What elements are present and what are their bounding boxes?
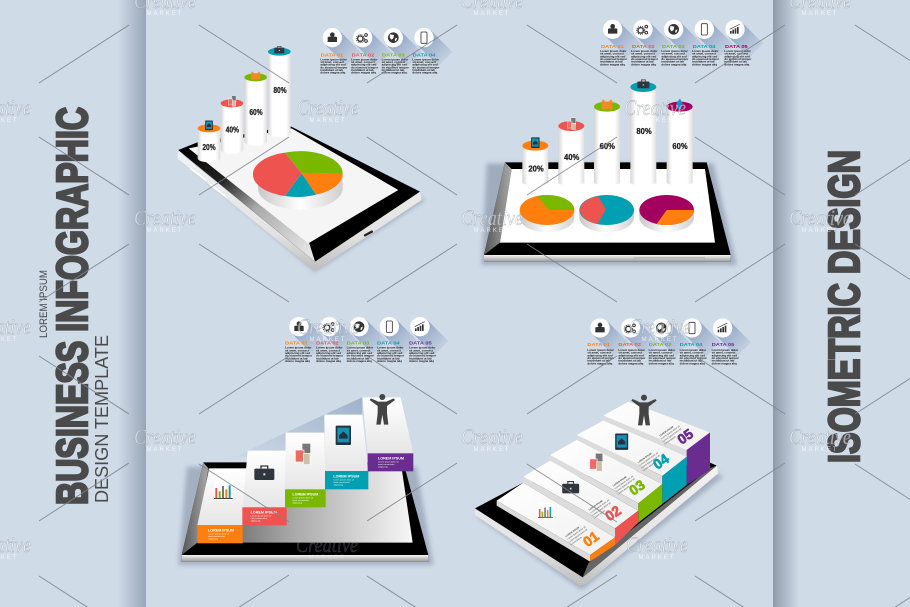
data 01: DATA 01	[285, 341, 308, 347]
data 03: do eiusmod tempor	[382, 65, 410, 69]
data legend	[285, 317, 448, 363]
watermarks: Creative	[297, 314, 359, 339]
data 04: incididunt ut lab	[692, 60, 715, 64]
data 04: do eiusmod tempor	[680, 356, 708, 360]
data 02: sit amet, consect	[631, 52, 655, 56]
data 05: DATA 05	[712, 342, 735, 348]
bar: 60%: 60%	[600, 142, 615, 151]
data 04	[680, 318, 720, 365]
data 01: DATA 01	[601, 44, 624, 50]
data 05	[724, 20, 763, 66]
data 03: Lorem ipsum dolor	[661, 49, 689, 53]
data 04: Lorem ipsum dolor	[692, 49, 719, 53]
step 5: 05	[674, 425, 696, 447]
data 05: do eiusmod tempor	[724, 57, 752, 61]
heading: business infographic: DESIGN TEMPLATE	[92, 335, 112, 503]
data 05: DATA 05	[725, 44, 748, 50]
data 01: dolore magna aliq	[320, 71, 346, 75]
step 1: Lorem ipsum dolor sit	[568, 528, 588, 543]
step 2: Lorem ipsum dolor sit	[590, 499, 610, 514]
data 01: do eiusmod tempor	[285, 354, 313, 358]
data 03: dolore magna aliq	[661, 62, 687, 66]
data 03: DATA 03	[649, 342, 672, 348]
watermarks: MARKET	[638, 555, 676, 561]
step 2	[242, 451, 287, 525]
data 01: adipiscing elit sed	[285, 351, 311, 355]
data 04: DATA 04	[377, 341, 400, 347]
data 03: dolore magna aliq	[649, 361, 674, 365]
bar: 40%	[221, 96, 243, 154]
data 03: dolore magna aliq	[347, 359, 372, 363]
data 03: adipiscing elit sed	[382, 63, 407, 67]
data 02: dolore magna aliq	[316, 359, 341, 363]
watermarks: Creative	[134, 424, 196, 449]
watermarks: Creative	[296, 532, 358, 557]
watermarks: Creative	[297, 95, 359, 120]
data 02: dolore magna aliq	[351, 71, 376, 75]
data 01: adipiscing elit sed	[320, 63, 346, 67]
data 01: Lorem ipsum dolor	[285, 346, 312, 350]
step 4: Lorem ipsum dolor sit	[639, 451, 659, 467]
watermarks: MARKET	[473, 447, 511, 453]
data 05	[712, 318, 751, 365]
data 04: dolore magna aliq	[412, 71, 438, 75]
bar: 40%	[558, 118, 584, 185]
data 03: sit amet, consect	[382, 60, 405, 64]
data 02: Lorem ipsum dolor	[351, 57, 378, 61]
bar: 60%	[594, 99, 620, 185]
step 1: Lorem ipsum	[570, 536, 583, 546]
step 1: Lorem ipsum dolor sit	[567, 525, 587, 541]
data 02: adipiscing elit sed	[316, 351, 342, 355]
watermarks: Creative	[134, 205, 196, 230]
data 03: incididunt ut lab	[649, 359, 671, 363]
step 1: LOREM IPSUM	[208, 528, 234, 532]
data 03: sit amet, consect	[347, 348, 370, 352]
heading: business infographic	[38, 107, 112, 505]
step 2: amet consectetur	[251, 517, 267, 520]
panel: tablet with flat staircase	[178, 317, 448, 565]
pie chart	[253, 151, 343, 210]
data 05: sit amet, consect	[409, 348, 433, 352]
data 03: Lorem ipsum dolor	[382, 57, 409, 61]
data 03: incididunt ut lab	[382, 68, 404, 72]
data 04: dolore magna aliq	[680, 361, 705, 365]
data 02	[316, 317, 358, 363]
tablet body	[484, 162, 731, 262]
step 4: LOREM IPSUM	[638, 453, 652, 464]
step 3: LOREM IPSUM	[613, 476, 627, 487]
watermarks: Creative	[461, 424, 523, 449]
data 01: DATA 01	[321, 52, 344, 58]
data 03: sit amet, consect	[649, 351, 672, 355]
data 02: DATA 02	[316, 341, 339, 347]
data 02: incididunt ut lab	[631, 60, 654, 64]
watermarks: MARKET	[308, 555, 346, 561]
data 03: adipiscing elit sed	[649, 353, 674, 357]
pie chart a	[520, 195, 574, 232]
data 04: incididunt ut lab	[412, 68, 435, 72]
panel: tablet with bars and three pies	[482, 20, 763, 265]
data 01: dolore magna aliq	[285, 359, 310, 363]
step 2: Lorem ipsum dolor sit	[251, 514, 272, 517]
data 04: dolore magna aliq	[692, 62, 717, 66]
step 2: adipiscing	[251, 521, 261, 523]
data 03: do eiusmod tempor	[649, 356, 677, 360]
device shadow	[482, 163, 737, 265]
step 1: adipiscing	[208, 539, 219, 541]
data 01: do eiusmod tempor	[600, 57, 628, 61]
data 02	[631, 20, 671, 66]
data 02: incididunt ut lab	[316, 356, 339, 360]
step 4	[324, 415, 368, 489]
step 5: Lorem ipsum dolor sit	[661, 425, 681, 440]
data 02: sit amet, consect	[618, 351, 642, 355]
step 3: amet consectetur	[292, 499, 309, 502]
pie chart b	[579, 195, 634, 232]
step 5: Lorem ipsum	[664, 435, 677, 445]
step 1: Lorem ipsum dolor sit	[208, 532, 229, 535]
data 04: Lorem ipsum dolor	[680, 348, 707, 352]
data 02: DATA 02	[618, 342, 641, 348]
data 04: adipiscing elit sed	[412, 63, 438, 67]
step 1	[197, 468, 248, 543]
data 02: do eiusmod tempor	[351, 65, 379, 69]
step 3: LOREM IPSUM	[292, 492, 318, 496]
phone body	[475, 463, 718, 586]
watermarks: MARKET	[309, 337, 347, 343]
data 04: sit amet, consect	[377, 348, 401, 352]
pie chart c	[639, 195, 694, 232]
data 05: dolore magna aliq	[712, 361, 737, 365]
data legend	[320, 28, 452, 75]
watermarks: MARKET	[146, 447, 184, 453]
step 4: LOREM IPSUM	[333, 474, 359, 478]
data 04: dolore magna aliq	[377, 359, 402, 363]
watermarks: MARKET	[473, 228, 511, 234]
data 02: dolore magna aliq	[631, 62, 656, 66]
data 04: incididunt ut lab	[680, 359, 702, 363]
bar: 20%	[198, 120, 220, 162]
data 03: dolore magna aliq	[382, 71, 407, 75]
data 03	[347, 317, 387, 363]
data 01: incididunt ut lab	[320, 68, 343, 72]
heading: isometric design: ISOMETRIC DESIGN	[820, 150, 869, 463]
data 02: dolore magna aliq	[618, 361, 644, 365]
data 05: adipiscing elit sed	[724, 54, 750, 58]
bar: 80%: 80%	[636, 127, 652, 136]
data 05: dolore magna aliq	[724, 62, 750, 66]
data 03: do eiusmod tempor	[347, 354, 375, 358]
data 01: incididunt ut lab	[587, 359, 610, 363]
step 5: amet consectetur	[378, 463, 395, 466]
panel: phone with isometric staircase	[475, 318, 751, 590]
data 02: Lorem ipsum dolor	[618, 348, 646, 352]
step 4: adipiscing	[333, 485, 344, 487]
bar: 60%: 60%	[249, 108, 263, 117]
bar: 60%	[244, 71, 267, 146]
watermarks: MARKET	[641, 337, 679, 343]
watermarks: Creative	[789, 424, 851, 449]
data legend	[587, 318, 751, 365]
data 04: Lorem ipsum dolor	[412, 57, 440, 61]
watermarks: MARKET	[636, 118, 674, 124]
data 04: adipiscing elit sed	[692, 54, 718, 58]
data 02: do eiusmod tempor	[316, 354, 344, 358]
data 01	[600, 20, 641, 66]
data 02: sit amet, consect	[316, 348, 340, 352]
data 04: DATA 04	[680, 342, 703, 348]
step 3: Lorem ipsum dolor sit	[616, 477, 636, 493]
step 1	[497, 483, 615, 562]
tablet body	[182, 462, 428, 562]
data 04	[412, 28, 452, 75]
watermarks: MARKET	[146, 228, 184, 234]
data 04: adipiscing elit sed	[377, 351, 403, 355]
data 01	[285, 317, 327, 363]
data 03: adipiscing elit sed	[661, 54, 687, 58]
data 04: do eiusmod tempor	[412, 65, 440, 69]
step 3	[285, 433, 326, 507]
data 03	[661, 20, 702, 66]
watermarks: Creative	[461, 205, 523, 230]
data 02: do eiusmod tempor	[618, 356, 646, 360]
data 01: DATA 01	[587, 342, 610, 348]
data 01: Lorem ipsum dolor	[320, 57, 348, 61]
data 01: adipiscing elit sed	[600, 54, 626, 58]
heading: business infographic: LOREM IPSUM	[38, 270, 50, 338]
watermarks: MARKET	[309, 118, 347, 124]
step 2: Lorem ipsum dolor sit	[592, 501, 612, 517]
data 03: DATA 03	[662, 44, 685, 50]
data 04: do eiusmod tempor	[377, 354, 405, 358]
step 3: 03	[626, 476, 648, 498]
data 01: sit amet, consect	[587, 351, 611, 355]
step 3	[550, 440, 662, 523]
data 02: do eiusmod tempor	[631, 57, 659, 61]
data 04: do eiusmod tempor	[692, 57, 720, 61]
device shadow	[477, 460, 723, 590]
bar: 20%: 20%	[202, 143, 216, 152]
step 4: Lorem ipsum	[642, 462, 655, 472]
bar: 20%	[522, 137, 548, 185]
data 01: do eiusmod tempor	[320, 65, 348, 69]
data 04: DATA 04	[693, 44, 716, 50]
watermarks: MARKET	[473, 11, 511, 17]
step 4: amet consectetur	[333, 481, 350, 484]
step 3: Lorem ipsum dolor sit	[614, 475, 634, 490]
data 02: incididunt ut lab	[618, 359, 641, 363]
watermarks: MARKET	[801, 228, 839, 234]
watermarks: MARKET	[801, 11, 839, 17]
data 01: Lorem ipsum dolor	[587, 348, 615, 352]
data 03: DATA 03	[347, 341, 370, 347]
phone body	[178, 126, 422, 271]
step 1: LOREM IPSUM	[565, 527, 580, 538]
step 2: LOREM IPSUM	[251, 510, 277, 514]
data 02: Lorem ipsum dolor	[631, 49, 658, 53]
watermarks: Creative	[789, 205, 851, 230]
data 03: incididunt ut lab	[661, 60, 684, 64]
bar: 60% purple	[667, 99, 693, 185]
step 4: Lorem ipsum dolor sit	[641, 454, 661, 469]
bar: 40%: 40%	[564, 153, 579, 162]
data 04: sit amet, consect	[680, 351, 703, 355]
watermarks: MARKET	[146, 11, 184, 17]
data 02: DATA 02	[352, 52, 375, 58]
data 01: dolore magna aliq	[600, 62, 625, 66]
device shadow	[180, 130, 425, 272]
step 3: Lorem ipsum	[617, 485, 630, 495]
data 05: do eiusmod tempor	[409, 354, 437, 358]
data 05: dolore magna aliq	[409, 359, 434, 363]
bar: 20%: 20%	[528, 164, 544, 173]
bar: 80%	[268, 46, 291, 137]
data 05	[409, 317, 448, 363]
data 01: adipiscing elit sed	[587, 353, 613, 357]
data 04: sit amet, consect	[412, 60, 436, 64]
data 01: sit amet, consect	[600, 52, 624, 56]
data 04	[377, 317, 418, 363]
watermarks: Creative	[626, 532, 688, 557]
data 03: DATA 03	[382, 52, 405, 58]
data 04: incididunt ut lab	[377, 356, 400, 360]
data 01: Lorem ipsum dolor	[600, 49, 627, 53]
data 02	[351, 28, 391, 75]
step 2: LOREM IPSUM	[589, 500, 603, 511]
step 5	[362, 394, 413, 471]
data 05: incididunt ut lab	[724, 60, 747, 64]
data 05: Lorem ipsum dolor	[724, 49, 752, 53]
watermarks: Creative	[624, 95, 686, 120]
data 05: sit amet, consect	[712, 351, 735, 355]
data 03: Lorem ipsum dolor	[347, 346, 374, 350]
data 04	[692, 20, 733, 66]
step 5: LOREM IPSUM	[659, 426, 674, 437]
data 01: sit amet, consect	[320, 60, 344, 64]
stair shadow	[225, 397, 362, 462]
data 04: DATA 04	[413, 52, 436, 58]
data 02: incididunt ut lab	[351, 68, 374, 72]
step 5: adipiscing	[378, 467, 388, 469]
data 02	[618, 318, 659, 365]
data 01: sit amet, consect	[285, 348, 309, 352]
data 03	[649, 318, 690, 365]
data 04: Lorem ipsum dolor	[377, 346, 404, 350]
data 02: adipiscing elit sed	[631, 54, 657, 58]
data 01	[320, 28, 361, 75]
step 3: adipiscing	[292, 503, 303, 505]
data 04: sit amet, consect	[692, 52, 716, 56]
step 2	[523, 461, 638, 545]
watermarks: Creative	[629, 314, 691, 339]
step 1: 01	[580, 528, 602, 550]
step 4: Lorem ipsum dolor sit	[333, 478, 354, 481]
step 5	[603, 395, 710, 485]
data 05: incididunt ut lab	[409, 356, 432, 360]
data 05: do eiusmod tempor	[712, 356, 740, 360]
data 01: incididunt ut lab	[285, 356, 308, 360]
data 05: Lorem ipsum dolor	[712, 348, 739, 352]
data 03: incididunt ut lab	[347, 356, 369, 360]
step 2: Lorem ipsum	[593, 509, 606, 519]
data 02: Lorem ipsum dolor	[316, 346, 343, 350]
bar: 80%	[630, 80, 656, 185]
data 05: Lorem ipsum dolor	[409, 346, 436, 350]
bar: 60% purple: 60%	[672, 142, 688, 151]
data 03: Lorem ipsum dolor	[649, 348, 676, 352]
bar: 40%: 40%	[226, 125, 239, 134]
device shadow	[178, 467, 433, 565]
data 03	[382, 28, 422, 75]
step 3: Lorem ipsum dolor sit	[292, 496, 313, 499]
step 2: 02	[602, 502, 624, 524]
data 03: adipiscing elit sed	[347, 351, 372, 355]
data 01: dolore magna aliq	[587, 361, 613, 365]
data 04: adipiscing elit sed	[680, 353, 705, 357]
data 03: sit amet, consect	[661, 52, 685, 56]
data 01	[587, 318, 628, 365]
data 01: incididunt ut lab	[600, 60, 623, 64]
data 05: sit amet, consect	[724, 52, 748, 56]
bar: 80%: 80%	[273, 86, 287, 95]
data 01: do eiusmod tempor	[587, 356, 615, 360]
step 4	[577, 421, 687, 504]
data legend	[600, 20, 763, 66]
data 05: adipiscing elit sed	[409, 351, 435, 355]
data 02: adipiscing elit sed	[618, 353, 644, 357]
step 5: Lorem ipsum dolor sit	[378, 460, 399, 463]
data 05: DATA 05	[409, 341, 432, 347]
data 05: incididunt ut lab	[712, 359, 734, 363]
data 02: sit amet, consect	[351, 60, 375, 64]
data 03: do eiusmod tempor	[661, 57, 689, 61]
data 02: DATA 02	[632, 44, 655, 50]
step 5: Lorem ipsum dolor sit	[662, 427, 682, 443]
step 5: LOREM IPSUM	[378, 456, 404, 460]
step 1: amet consectetur	[208, 535, 225, 538]
data 02: adipiscing elit sed	[351, 63, 377, 67]
left side band shadow	[118, 0, 146, 607]
step 4: 04	[650, 450, 672, 472]
watermarks: MARKET	[801, 447, 839, 453]
right side band shadow	[773, 0, 799, 607]
panel: phone with bars and pie	[178, 28, 452, 272]
data 05: adipiscing elit sed	[712, 353, 737, 357]
